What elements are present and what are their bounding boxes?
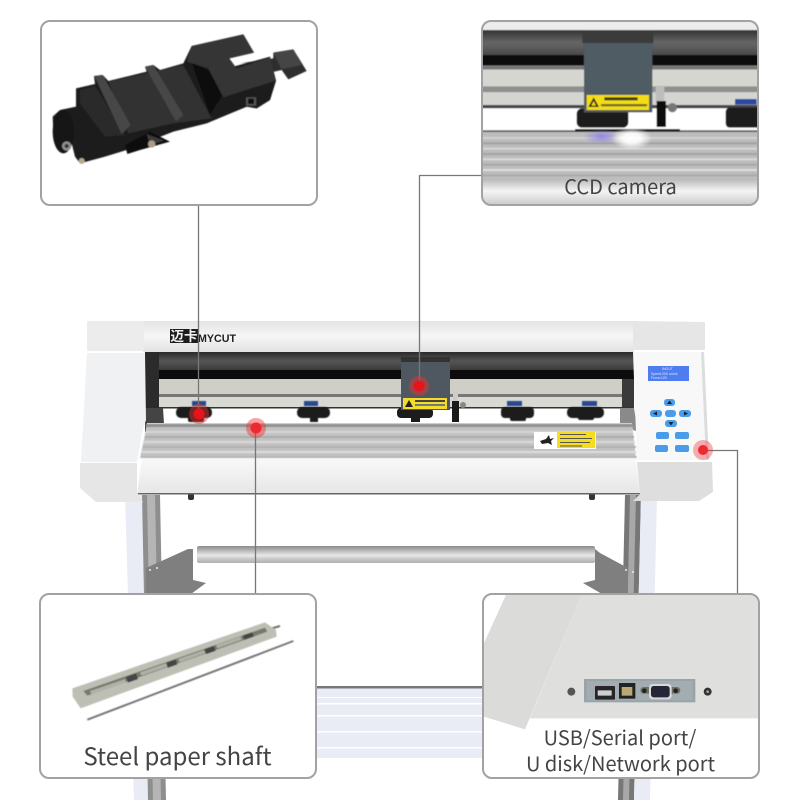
logo	[170, 329, 236, 345]
pinch wheel photo	[53, 34, 307, 164]
right bracket	[583, 549, 634, 594]
feet	[188, 493, 595, 500]
panel border	[483, 594, 759, 778]
ports label	[526, 722, 715, 777]
keypad	[650, 399, 691, 452]
steel shaft label: Steel paper shaft	[83, 737, 272, 772]
right leg	[618, 495, 657, 800]
stand: legs, roller and crossbar	[125, 495, 657, 800]
ports photo	[482, 593, 762, 729]
logo: MYCUT	[198, 333, 236, 345]
paper roller	[197, 546, 595, 563]
top band	[143, 321, 634, 352]
carriage opening	[145, 352, 638, 432]
ports label: U disk/Network port	[526, 748, 715, 777]
panel: pinch wheel	[41, 21, 317, 205]
left leg	[125, 495, 166, 800]
LCD screen: Speed:200 mm/s	[651, 372, 678, 376]
connector: roller to pinch wheel panel	[198, 205, 200, 412]
pinch rollers	[176, 401, 604, 422]
right end cap	[633, 321, 713, 501]
marker: pinch wheel	[189, 404, 209, 424]
connector: platen to steel shaft panel	[254, 428, 256, 594]
CCD camera photo	[475, 20, 765, 207]
LCD screen: Force:120	[651, 376, 667, 380]
platen ridges	[140, 424, 637, 458]
panel: steel paper shaft	[40, 594, 316, 778]
front cover	[137, 423, 640, 494]
connector: carriage to CCD panel	[420, 176, 482, 386]
marker: ports	[693, 440, 713, 460]
cutting carriage	[397, 357, 466, 422]
marker: camera	[409, 376, 429, 396]
bottom edge	[137, 493, 640, 494]
logo: 迈卡	[170, 329, 198, 344]
cutting plotter machine	[80, 321, 713, 502]
ports label: USB/Serial port/	[544, 722, 696, 751]
steel shaft photo	[72, 622, 293, 720]
left bracket	[146, 549, 206, 594]
LCD screen: INOUT	[662, 367, 674, 371]
left end cap	[80, 321, 146, 502]
warning label	[534, 432, 596, 449]
panel border	[482, 21, 758, 205]
connector: side to port panel	[703, 450, 738, 594]
LCD screen	[648, 366, 689, 381]
panel: ports	[482, 593, 762, 778]
marker: steel shaft	[246, 418, 266, 438]
crossbar	[317, 686, 483, 758]
CCD camera label: CCD camera	[564, 171, 677, 200]
panel: CCD camera	[475, 20, 765, 207]
